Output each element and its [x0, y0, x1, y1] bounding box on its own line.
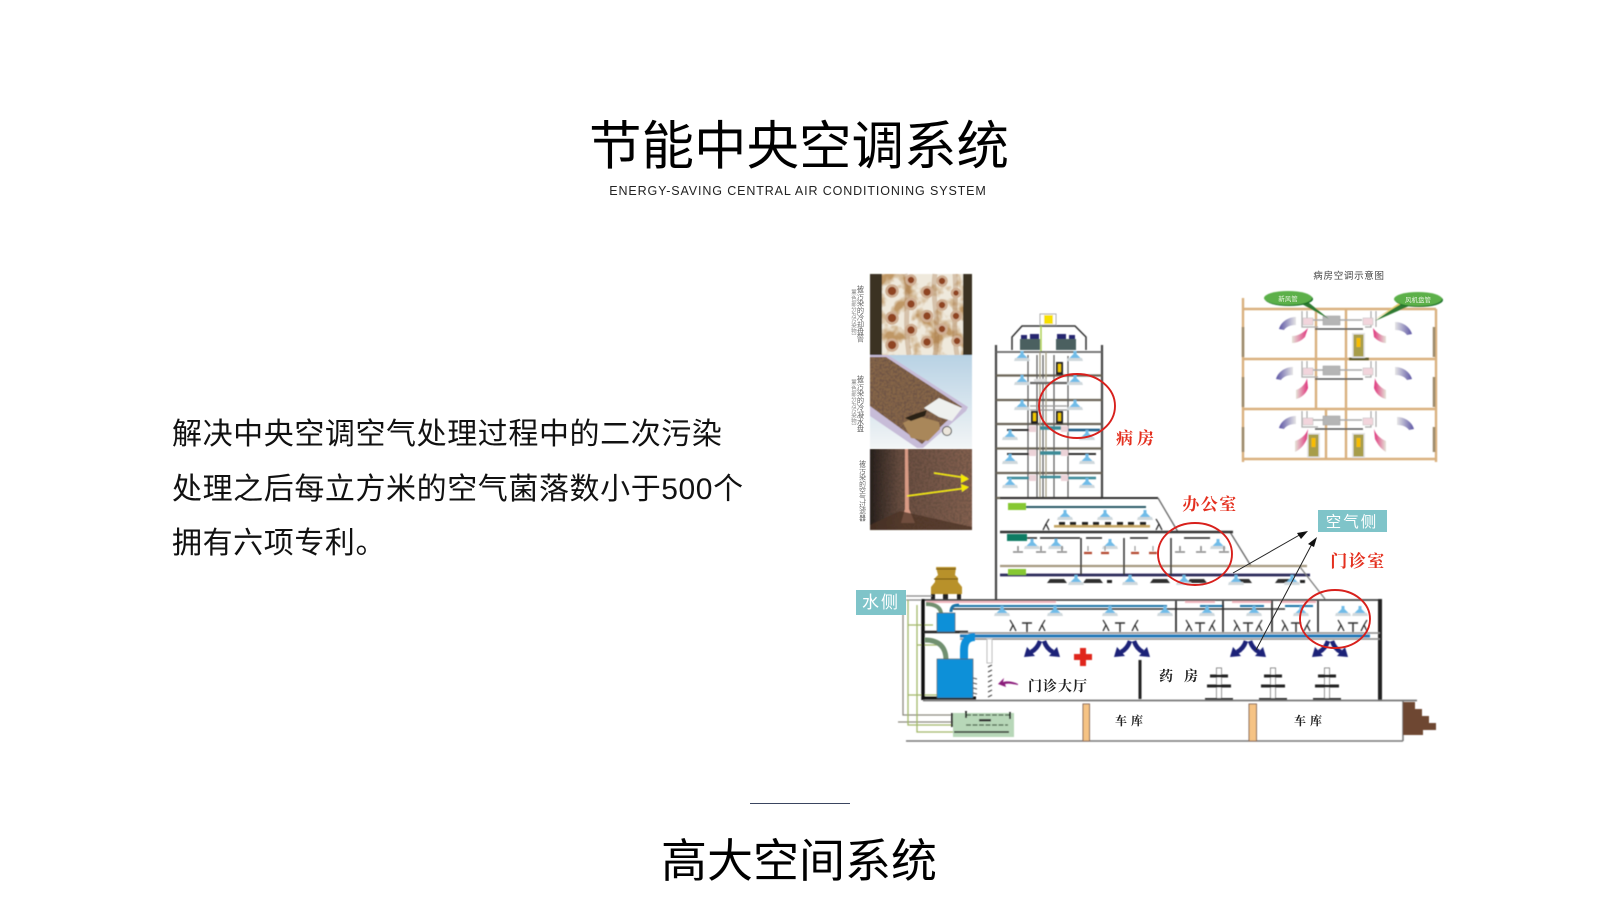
body text: 拥有六项专利。 — [172, 527, 386, 560]
floor labels: 药房 — [1159, 668, 1209, 685]
side diagram labels: 病房空调示意图 — [1313, 270, 1385, 282]
photo captions: （黑色部分为污染物） — [850, 285, 857, 339]
room labels: 门诊室 — [1330, 551, 1386, 571]
label: air side — [1318, 510, 1387, 532]
chiller unit — [952, 711, 1014, 737]
photo: contaminated cooling coil — [870, 274, 972, 355]
section title: 高大空间系统 — [661, 835, 937, 887]
label: water side: 水侧 — [862, 593, 900, 612]
photo: contaminated air filter — [870, 449, 972, 530]
building: main floor — [923, 599, 1417, 700]
room labels — [1116, 428, 1386, 571]
floor labels: 门诊大厅 — [1028, 678, 1088, 695]
label: water side — [856, 590, 906, 615]
body text: 处理之后每立方米的空气菌落数小于500个 — [172, 472, 744, 506]
building: office block — [1000, 498, 1325, 599]
body text — [172, 418, 744, 560]
building: tower — [996, 314, 1102, 600]
title: 节能中央空调系统 — [589, 117, 1009, 176]
label: air side: 空气侧 — [1326, 513, 1378, 531]
floor labels — [1028, 668, 1326, 728]
water pipes — [898, 596, 953, 732]
side diagram labels: 新风管 — [1278, 294, 1298, 303]
divider — [750, 803, 850, 804]
garage — [906, 701, 1436, 741]
photo captions: （黑色部分为污染物） — [850, 375, 857, 429]
floor labels: 车库 — [1294, 713, 1326, 728]
side diagram: ward air conditioning — [1243, 291, 1443, 462]
side diagram labels: 风机盘管 — [1405, 295, 1432, 304]
photo captions — [850, 284, 866, 522]
arrows to air side — [1233, 531, 1317, 650]
red circles — [1039, 374, 1370, 648]
cooling tower — [931, 567, 962, 600]
room labels: 病房 — [1116, 428, 1158, 448]
photo captions: 被污染的冷凝水盘 — [856, 374, 866, 433]
photo captions: 被污染的冷却盘管 — [856, 284, 866, 344]
side diagram labels — [1278, 270, 1432, 304]
subtitle: ENERGY-SAVING CENTRAL AIR CONDITIONING SYSTEM — [609, 184, 987, 198]
photo: contaminated drain pan — [870, 355, 972, 448]
room labels: 办公室 — [1182, 494, 1238, 514]
photo captions: 被污染的空气过滤器 — [858, 459, 866, 522]
floor labels: 车库 — [1115, 713, 1147, 728]
body text: 解决中央空调空气处理过程中的二次污染 — [172, 418, 722, 451]
